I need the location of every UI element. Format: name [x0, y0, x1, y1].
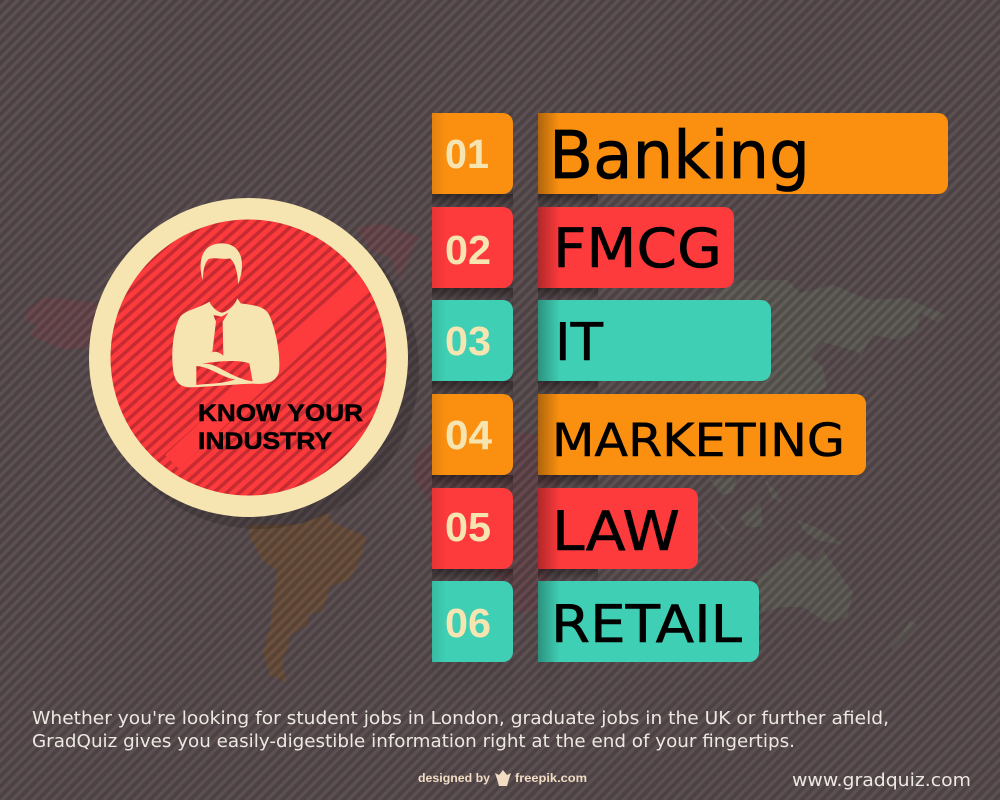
number tab 04: 04 [445, 412, 492, 458]
column shadows [432, 113, 560, 708]
icon: businessman silhouette [172, 243, 279, 387]
label bar marketing: MARKETING [552, 414, 845, 467]
label bar banking [538, 113, 948, 207]
badge cream ring [89, 198, 408, 517]
website url: www.gradquiz.com [792, 770, 971, 791]
number tab 01 [432, 113, 513, 207]
icon: freepik crown [495, 770, 511, 786]
number tab 05: 05 [445, 504, 491, 550]
row 04: marketing [432, 394, 866, 488]
row 03: it [432, 300, 771, 394]
label bar retail [538, 581, 759, 662]
row 05: law [432, 488, 698, 581]
description text: Whether you're looking for student jobs in London, graduate jobs in the UK or further afield, [32, 708, 889, 729]
description text [32, 708, 889, 752]
label bar fmcg: FMCG [553, 217, 722, 280]
row 02: fmcg [432, 207, 734, 300]
label bar law [538, 488, 698, 581]
number tab 02: 02 [445, 227, 491, 273]
number tab 03: 03 [445, 318, 491, 364]
label bar it: IT [555, 313, 603, 373]
world map silhouette [25, 223, 945, 682]
label bar retail: RETAIL [551, 595, 742, 655]
number tab 01: 01 [445, 131, 489, 177]
label bar law: LAW [552, 500, 680, 563]
badge title: KNOW YOUR [198, 400, 363, 427]
badge striped red disc [110, 220, 386, 496]
label bar fmcg [538, 207, 734, 300]
number tab 06: 06 [445, 600, 491, 646]
badge title [198, 400, 363, 455]
freepik credit: designed by [418, 771, 490, 785]
description text: GradQuiz gives you easily-digestible information right at the end of your fingertips. [32, 731, 795, 752]
freepik credit: freepik.com [515, 771, 587, 785]
badge shadow [99, 209, 419, 529]
number tab 03 [432, 300, 513, 394]
number tab 04 [432, 394, 513, 488]
row 01: banking [432, 113, 948, 207]
label bar marketing [538, 394, 866, 488]
label bar it [538, 300, 771, 394]
number tab 05 [432, 488, 513, 581]
number tab 02 [432, 207, 513, 300]
row 06: retail [432, 581, 759, 662]
label bar banking: Banking [549, 117, 810, 194]
number tab 06 [432, 581, 513, 662]
badge title: INDUSTRY [198, 428, 332, 455]
freepik credit [418, 770, 587, 786]
panel: know your industry badge [89, 198, 419, 529]
